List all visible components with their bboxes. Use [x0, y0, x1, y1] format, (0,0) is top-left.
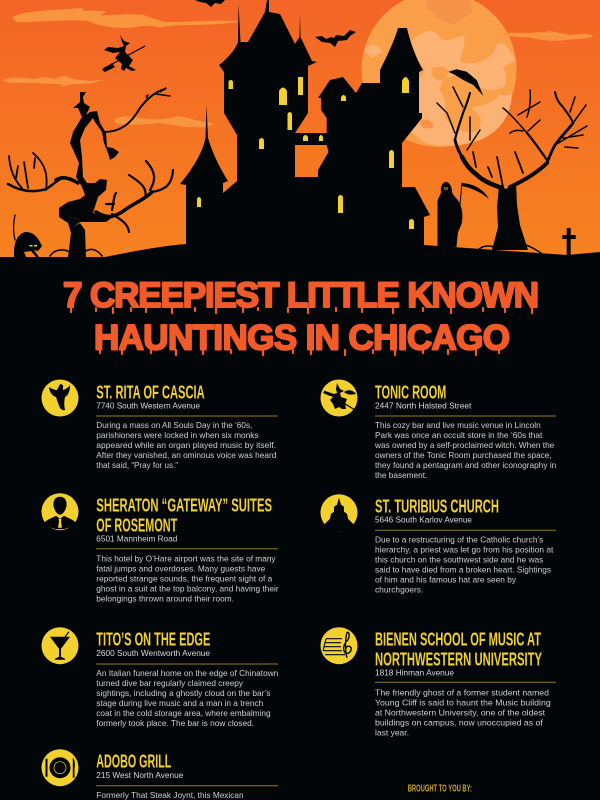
description: they found a pentagram and other iconography in — [375, 460, 557, 470]
description — [96, 420, 277, 470]
heading: TITO’S ON THE EDGE — [96, 629, 210, 650]
panel: Tonic Room — [320, 380, 557, 480]
panel: Tito's on the Edge — [42, 627, 279, 728]
description — [375, 535, 554, 595]
heading: ST. RITA OF CASCIA — [96, 381, 205, 402]
orange sky — [0, 0, 600, 260]
ground — [0, 244, 600, 262]
description: During a mass on All Souls Day in the ‘60s, — [96, 420, 252, 430]
description: the basement. — [375, 470, 427, 480]
description: said to have died from a broken heart. Sightings — [375, 565, 551, 575]
full moon — [362, 0, 516, 147]
title: HAUNTINGS IN CHICAGO — [94, 318, 510, 358]
description: appeared while an organ played music by itself. — [96, 440, 276, 450]
icon: man in suit — [42, 493, 78, 530]
right bare tree — [437, 69, 587, 253]
description: fatal jumps and overdoses. Many guests have — [96, 564, 266, 574]
description: last year. — [375, 728, 409, 738]
grim reaper with scythe — [438, 182, 489, 247]
haunted house silhouette — [180, 0, 430, 250]
description — [374, 420, 557, 480]
description: sightings, including a ghostly cloud on the bar’s — [96, 688, 271, 698]
description: Formerly That Steak Joynt, this Mexican — [96, 790, 244, 800]
description: belongings thrown around their room. — [96, 594, 234, 604]
panel: Bienen School of Music — [320, 627, 556, 738]
address: 5646 South Karlov Avenue — [375, 515, 472, 525]
description: stage during live music and a man in a trench — [96, 698, 264, 708]
icon: church silhouette — [320, 494, 358, 531]
description: buildings on campus, now unoccupied as of — [375, 718, 543, 728]
address: 2600 South Wentworth Avenue — [96, 648, 210, 658]
panel: St. Turibius Church — [320, 494, 556, 595]
description: this church on the southwest side and he was — [375, 555, 543, 565]
description — [96, 554, 279, 604]
icon: ghost monk — [42, 380, 78, 416]
clouds — [4, 8, 593, 127]
description: Due to a restructuring of the Catholic church’s — [375, 535, 543, 545]
grave cross — [562, 228, 576, 256]
left bare tree — [8, 88, 173, 257]
panel: Adobo Grill — [42, 749, 278, 800]
description: After they vanished, an ominous voice was heard — [96, 450, 277, 460]
description: of him and his famous hat are seen by — [375, 575, 517, 585]
description: reported strange sounds, the frequent sight of a — [96, 574, 273, 584]
heading: TONIC ROOM — [375, 381, 446, 402]
description: hierarchy, a priest was let go from his position at — [375, 545, 554, 555]
description — [375, 688, 551, 738]
description: parishioners were locked in when six monks — [96, 430, 259, 440]
description: owners of the Tonic Room purchased the space, — [375, 450, 552, 460]
address: 215 West North Avenue — [96, 770, 184, 780]
description: churchgoers. — [375, 585, 423, 595]
raven — [448, 69, 483, 96]
lit windows — [197, 77, 414, 229]
orange gap between towers — [295, 145, 328, 177]
address: 7740 South Western Avenue — [96, 400, 200, 410]
heading: ST. TURIBIUS CHURCH — [375, 496, 499, 517]
heading: ADOBO GRILL — [96, 751, 171, 772]
description: Park was once an occult store in the ‘60s that — [375, 430, 543, 440]
description: coat in the cold storage area, where embalming — [96, 708, 271, 718]
icon: sheet music with treble clef — [320, 627, 358, 664]
panel: haunted night scene — [0, 0, 600, 262]
description: An Italian funeral home on the edge of Chinatown — [96, 668, 279, 678]
panel: Sheraton Gateway Suites: OF ROSEMONT — [96, 515, 178, 536]
description: was owned by a self-proclaimed witch. When the — [374, 440, 555, 450]
heading: SHERATON “GATEWAY” SUITES — [96, 495, 272, 516]
description: Young Cliff is said to haunt the Music building — [375, 698, 551, 708]
address: 2447 North Halsted Street — [375, 400, 472, 410]
description: The friendly ghost of a former student named — [375, 688, 549, 698]
black cat — [14, 215, 42, 257]
title blood drips — [71, 308, 532, 355]
address: 1818 Hinman Avenue — [375, 668, 454, 678]
description: This hotel by O’Hare airport was the site of many — [96, 554, 276, 564]
description — [96, 668, 279, 728]
icon: plate and cutlery — [42, 749, 78, 786]
title — [63, 276, 539, 358]
panel: St. Rita of Cascia — [42, 380, 278, 470]
address: 6501 Mannheim Road — [96, 534, 178, 544]
reaper eyes — [444, 187, 448, 190]
description: that said, “Pray for us.” — [96, 460, 178, 470]
flying bats — [195, 0, 356, 47]
description: turned dive bar regularly claimed creepy — [96, 678, 244, 688]
panel: Sheraton Gateway Suites — [42, 493, 279, 604]
title: 7 CREEPIEST LITTLE KNOWN — [63, 276, 539, 315]
description: formerly took place. The bar is now closed. — [96, 718, 254, 728]
witch on broomstick — [102, 35, 145, 72]
footer credit: BROUGHT TO YOU BY: — [408, 784, 472, 795]
description: This cozy bar and live music venue in Lincoln — [375, 420, 541, 430]
description: ghost in a suit at the top balcony, and having their — [96, 584, 279, 594]
cat eyes — [30, 245, 37, 246]
icon: witch on broom — [320, 380, 358, 416]
icon: martini glass — [42, 627, 78, 664]
description: at Northwestern University, one of the oldest — [375, 708, 546, 718]
